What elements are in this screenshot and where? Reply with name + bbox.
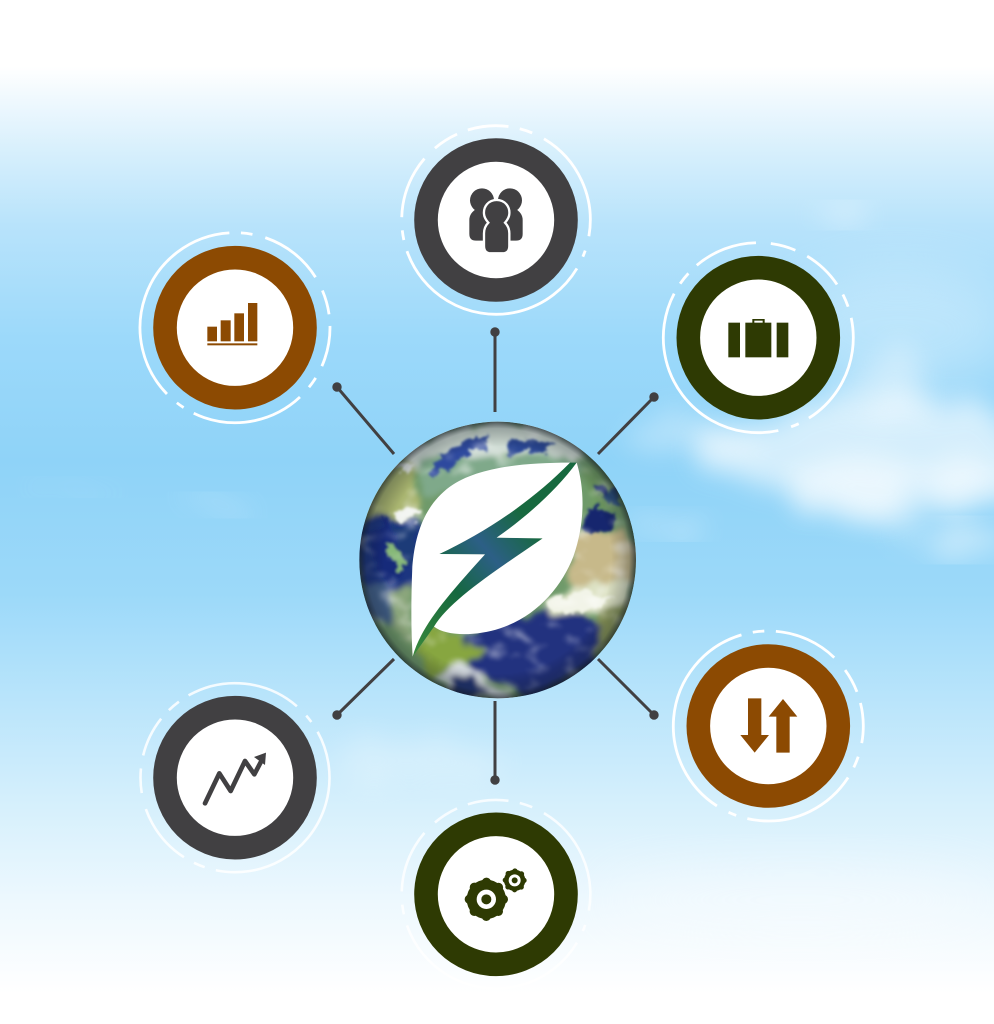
node: up and down arrows (lower right)	[665, 623, 871, 829]
bolt gap	[413, 463, 577, 657]
node: trend line (lower left)	[107, 649, 363, 906]
donut	[688, 268, 828, 408]
icon: people	[469, 188, 523, 253]
earth	[359, 422, 636, 698]
dashed ring	[107, 649, 363, 906]
icon: gears	[467, 870, 525, 919]
donut	[698, 656, 838, 796]
connector: bottom	[492, 701, 498, 783]
node: briefcase (upper right)	[651, 230, 866, 445]
leaf logo	[411, 463, 583, 657]
cloud texture	[360, 424, 633, 698]
donut	[426, 150, 566, 290]
dashed ring	[367, 91, 625, 349]
connector: top	[492, 329, 498, 412]
icon: trend arrow	[205, 753, 266, 803]
globe with leaf logo	[359, 422, 636, 698]
donut	[165, 258, 305, 398]
connector: lower right	[598, 659, 657, 718]
icon: bar chart	[207, 303, 257, 345]
connector: lower left	[334, 659, 394, 718]
dashed ring	[367, 765, 625, 1024]
node: bar chart (upper left)	[114, 207, 356, 448]
dashed ring	[651, 230, 866, 445]
icon: briefcase	[728, 319, 788, 357]
donut	[426, 824, 566, 964]
icon: arrows	[740, 698, 797, 753]
dashed ring	[114, 207, 356, 448]
dashed ring	[665, 623, 871, 829]
donut	[165, 708, 305, 848]
node: gears (bottom)	[367, 765, 625, 1024]
connector: upper right	[598, 394, 657, 454]
node: people (top)	[367, 91, 625, 349]
connector: upper left	[334, 384, 394, 454]
